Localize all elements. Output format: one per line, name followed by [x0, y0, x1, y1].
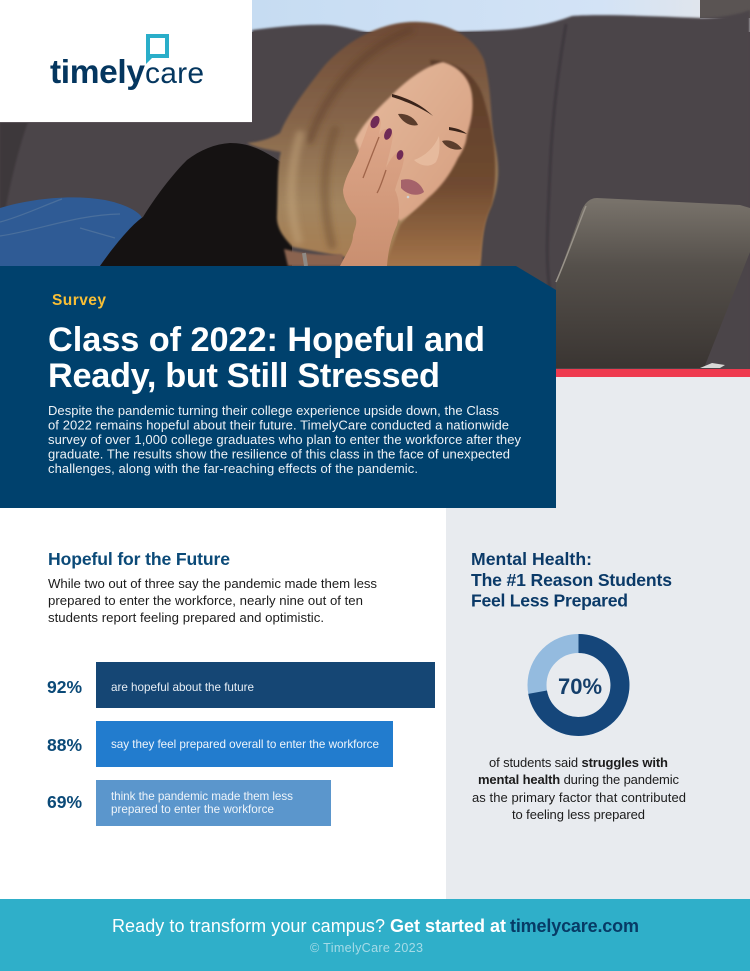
intro paragraph: challenges, along with the far-reaching effects of the pandemic. [48, 461, 418, 476]
panel: mental health [471, 549, 686, 822]
donut chart: 70% [537, 644, 620, 726]
call to action: Get started at [390, 916, 506, 936]
heading: Mental Health: [471, 549, 592, 569]
hand [340, 116, 404, 266]
icon: speech bubble [146, 34, 169, 64]
intro paragraph: survey of over 1,000 college graduates who plan to enter the workforce after they [48, 432, 522, 447]
bar: 92%: 92% [47, 677, 82, 697]
donut chart: 70%: 70% [558, 674, 602, 699]
bar: 69% [47, 780, 331, 826]
body text: prepared to enter the workforce, nearly nine out of ten [48, 593, 363, 608]
title: Ready, but Still Stressed [48, 357, 440, 395]
call to action: timelycare.com [510, 916, 639, 936]
panel: intro [0, 266, 556, 508]
intro paragraph: graduate. The results show the resilience of this class in the face of unexpected [48, 446, 510, 462]
bar: 69%: prepared to enter the workforce [111, 803, 274, 816]
heading: Feel Less Prepared [471, 590, 628, 610]
bar: 88%: say they feel prepared overall to enter the workforce [111, 738, 379, 751]
panel: mental health side background [446, 377, 750, 899]
footer [0, 899, 750, 971]
body text: While two out of three say the pandemic made them less [48, 576, 377, 591]
wordmark [50, 54, 204, 91]
panel: hopeful for the future [47, 549, 435, 826]
black shirt [100, 143, 292, 266]
intro paragraph: Despite the pandemic turning their college experience upside down, the Class [48, 403, 500, 418]
hair strands [291, 30, 410, 245]
bar: 92%: are hopeful about the future [111, 681, 254, 694]
bar: 69%: think the pandemic made them less [111, 790, 293, 803]
bar: 88%: 88% [47, 735, 82, 755]
body text: students report feeling prepared and optimistic. [48, 610, 324, 625]
bar: 69%: 69% [47, 792, 82, 812]
intro paragraph [48, 403, 522, 476]
eyebrow: Survey [52, 292, 106, 309]
intro paragraph: of 2022 remains hopeful about their future. TimelyCare conducted a nationwide [48, 418, 509, 432]
necklace [304, 253, 306, 266]
caption: as the primary factor that contributed [472, 790, 686, 805]
call to action: Ready to transform your campus? [112, 916, 385, 936]
title: Class of 2022: Hopeful and [48, 321, 485, 359]
eyes, brows, nose, lips [392, 94, 433, 116]
title [48, 321, 485, 395]
caption [472, 755, 686, 822]
bar chart [47, 662, 435, 826]
body text [48, 576, 377, 625]
face [355, 62, 473, 221]
caption: to feeling less prepared [512, 807, 645, 822]
copyright: © TimelyCare 2023 [310, 941, 423, 955]
bar: 88% [47, 721, 393, 767]
heading [471, 549, 672, 610]
call to action [112, 916, 639, 936]
wordmark: timely [50, 54, 145, 91]
nails [369, 114, 381, 130]
hero photo: student looking at laptop on a sofa [0, 0, 750, 377]
jeans [0, 197, 142, 266]
bar: 92% [47, 662, 435, 708]
accent bar: red [556, 369, 750, 377]
heading: Hopeful for the Future [48, 549, 230, 569]
logo box [0, 0, 252, 123]
caption: of students said struggles with [489, 755, 668, 770]
chest skin [284, 249, 345, 266]
wordmark: care [145, 57, 204, 90]
hair back [247, 22, 498, 266]
laptop [556, 198, 750, 368]
heading: The #1 Reason Students [471, 570, 672, 590]
caption: mental health during the pandemic [478, 772, 680, 787]
